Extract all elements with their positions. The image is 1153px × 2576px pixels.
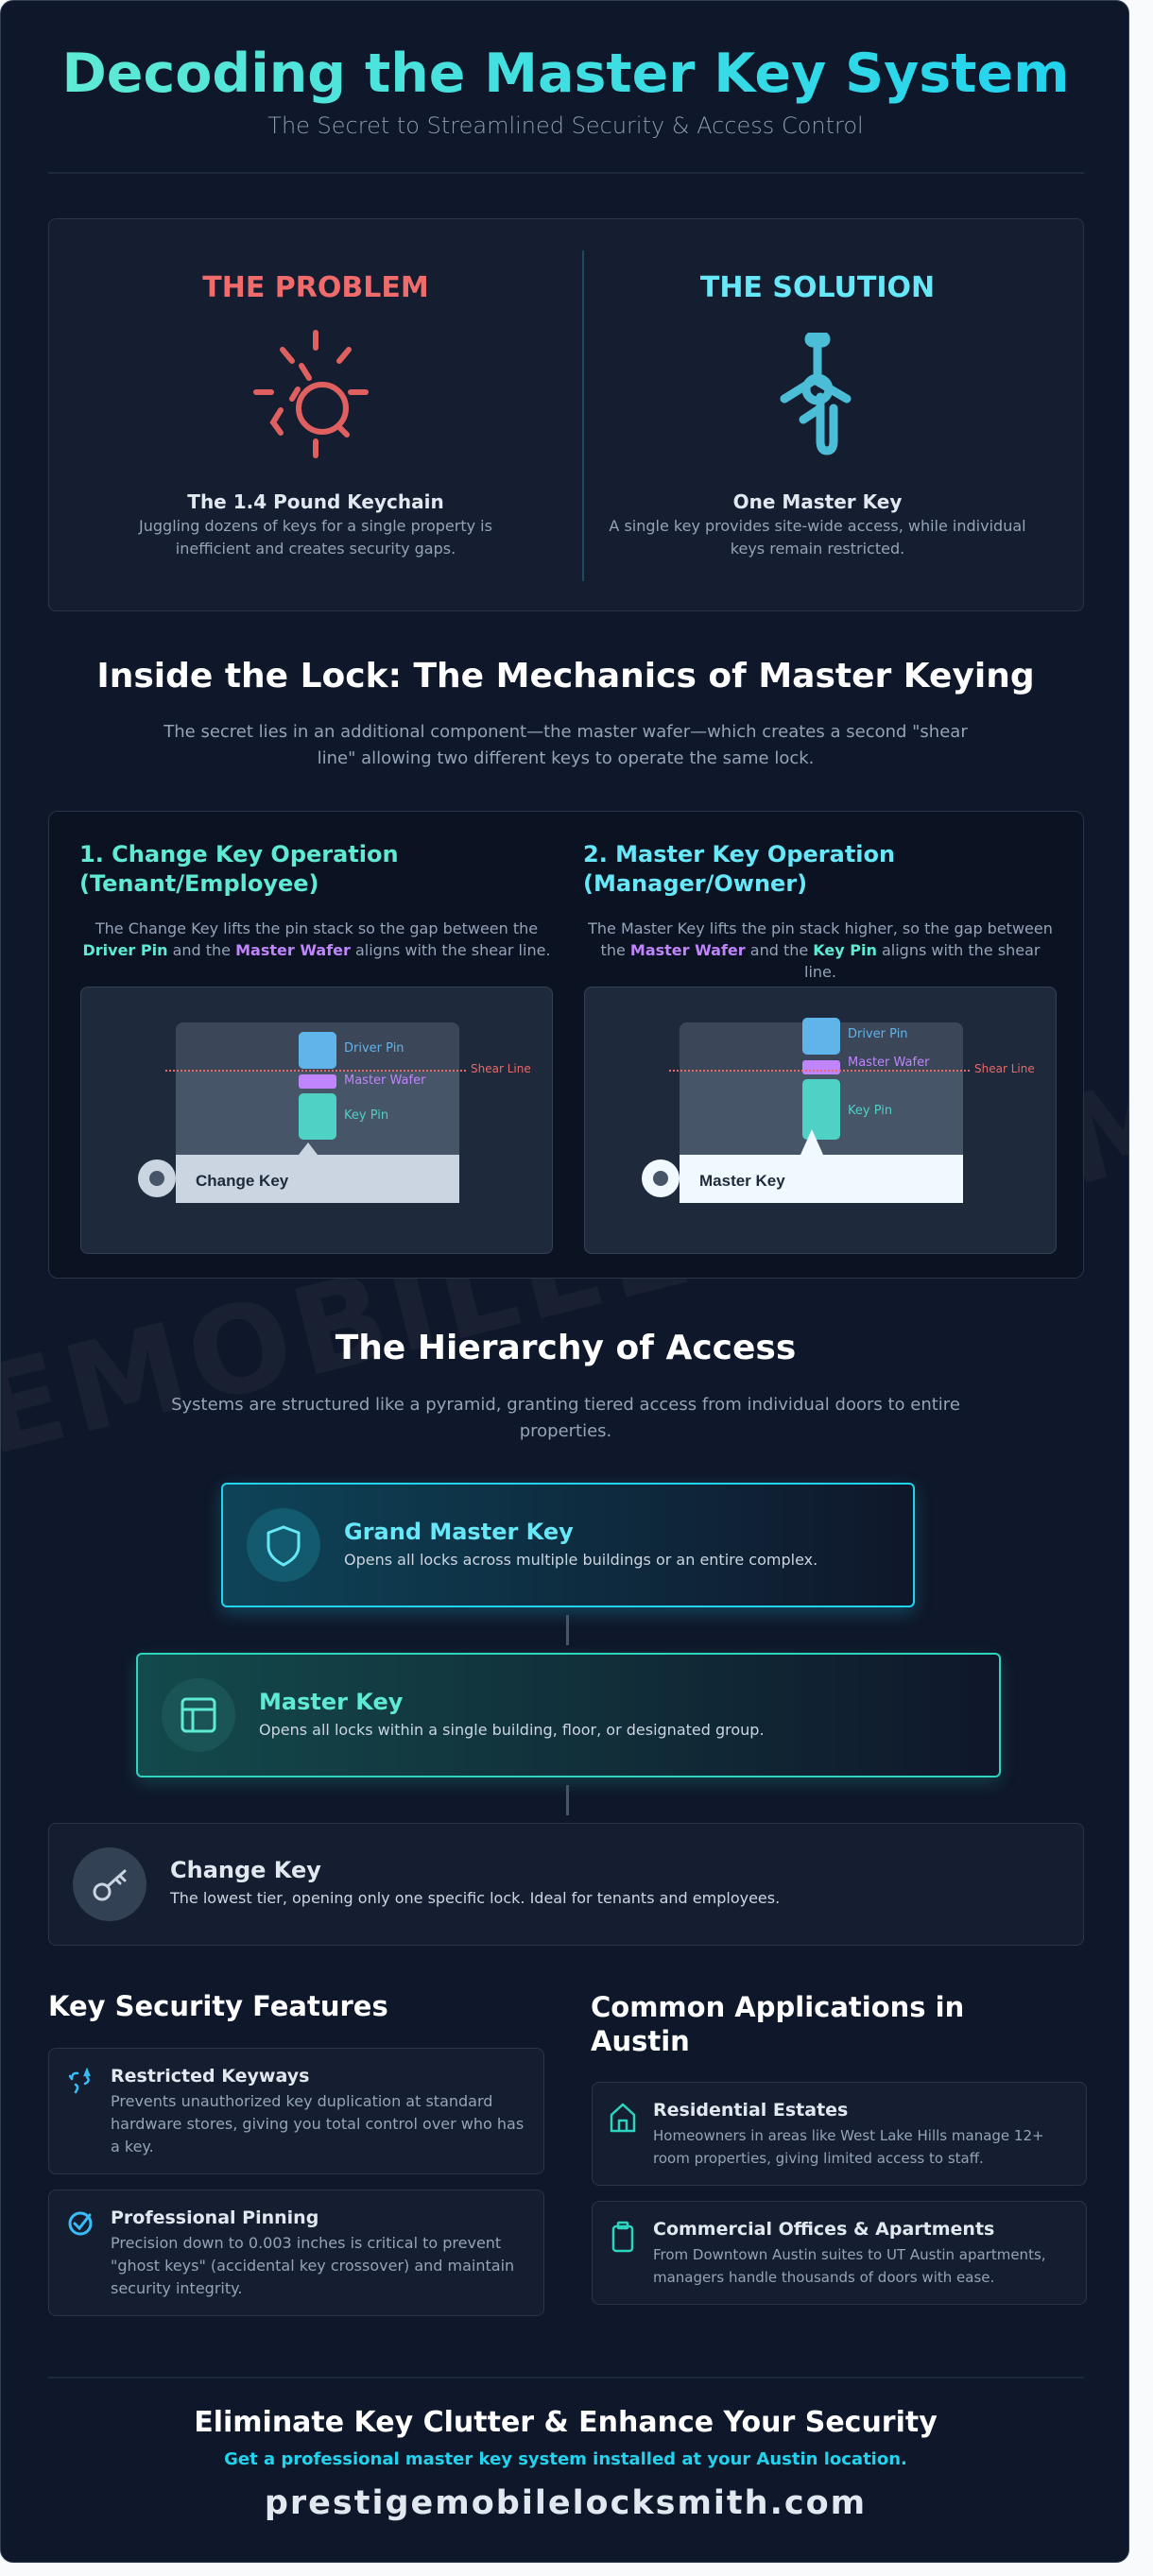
card: residential estates: Residential Estates (653, 2100, 848, 2121)
diagram: change key (80, 987, 553, 1254)
card: commercial offices (592, 2201, 1087, 2305)
column: master key operation (583, 841, 1053, 981)
panel: mechanics (48, 811, 1084, 1279)
heading (79, 841, 399, 897)
icon: check badge (68, 2211, 93, 2236)
heading: 1. Change Key Operation (79, 841, 399, 867)
footer: call to action: Get a professional master key system installed at your Austin location. (224, 2449, 907, 2469)
card: professional pinning (48, 2190, 544, 2316)
card: professional pinning: Professional Pinning (111, 2207, 318, 2228)
heading: the solution: THE SOLUTION (700, 271, 935, 304)
text: one master key: One Master Key (733, 490, 902, 513)
key: master key: Master Key (699, 1172, 785, 1190)
heading: inside the lock: Inside the Lock: The Mechanics of Master Keying (96, 657, 1035, 696)
key: master key (642, 1129, 963, 1203)
heading: (Manager/Owner) (583, 870, 807, 897)
tier: grand master key: Opens all locks across multiple buildings or an entire complex. (344, 1551, 817, 1569)
description: Driver Pin and the Master Wafer aligns with the shear line. (82, 941, 551, 959)
pin: wafer (299, 1074, 336, 1089)
tier: grand master key: Grand Master Key (344, 1519, 574, 1545)
key: change key (138, 1142, 459, 1203)
text: hierarchy intro: Systems are structured like a pyramid, granting tiered access from individual doors to entire properties. (171, 1395, 960, 1441)
diagram: master key (584, 987, 1057, 1254)
diagram: change key: Key Pin (344, 1108, 388, 1123)
tier: change key: Change Key (170, 1857, 321, 1883)
pin: key (299, 1093, 336, 1140)
description: The Master Key lifts the pin stack higher, so the gap between the Master Wafer and the Key Pin aligns with the shear line. (588, 919, 1053, 981)
tier: master key: Master Key (259, 1689, 403, 1715)
icon: house (611, 2104, 635, 2132)
icon: key (73, 1847, 146, 1921)
text: keychain: Juggling dozens of keys for a single property is (139, 517, 492, 535)
solution column (609, 271, 1026, 558)
heading: (Tenant/Employee) (79, 870, 319, 897)
icon: arrows (68, 2068, 91, 2094)
footer: call to action: Eliminate Key Clutter & Enhance Your Security (194, 2406, 938, 2439)
text: one master key: A single key provides site-wide access, while individual (609, 517, 1026, 535)
diagram: master key: Key Pin (848, 1104, 892, 1118)
description (82, 919, 551, 959)
tier: master key: Opens all locks within a single building, floor, or designated group. (259, 1721, 765, 1739)
subtitle: The Secret to Streamlined Security & Access Control (267, 112, 864, 139)
text: one master key (609, 490, 1026, 558)
heading: hierarchy: The Hierarchy of Access (336, 1329, 796, 1367)
diagram: change key: Master Wafer (344, 1073, 425, 1088)
heading: common applications: Common Applications in Austin (591, 1991, 964, 2057)
icon: layout (162, 1678, 235, 1752)
card: commercial offices: Commercial Offices & Apartments (653, 2219, 994, 2240)
card: commercial offices: From Downtown Austin suites to UT Austin apartments, managers handle thousands of doors with ease. (653, 2246, 1046, 2286)
panel: problem vs solution (48, 218, 1084, 611)
key: change key: Change Key (196, 1172, 289, 1190)
description: The Change Key lifts the pin stack so the gap between the (95, 919, 538, 937)
text: one master key: keys remain restricted. (731, 540, 904, 558)
card: residential estates (592, 2082, 1087, 2186)
diagram: change key: Shear Line (471, 1062, 531, 1075)
heading: the problem: THE PROBLEM (202, 271, 429, 304)
icon: broken keychain burst (253, 330, 369, 458)
tier: master key (136, 1653, 1001, 1777)
footer: call to action (194, 2406, 938, 2522)
text: keychain (138, 490, 492, 558)
text: keychain: The 1.4 Pound Keychain (187, 490, 444, 513)
card: restricted keyways: Restricted Keyways (111, 2066, 309, 2087)
title: Decoding the Master Key System (61, 43, 1070, 105)
card: residential estates: Homeowners in areas like West Lake Hills manage 12+ room properties, giving limited access to staff. (653, 2127, 1044, 2167)
diagram: master key: Shear Line (974, 1062, 1035, 1075)
shear line (165, 1070, 466, 1072)
tier: grand master key (221, 1483, 915, 1607)
diagram: master key: Driver Pin (848, 1027, 908, 1041)
icon: clipboard (612, 2221, 633, 2253)
heading (583, 841, 895, 897)
problem column (138, 271, 492, 558)
card: professional pinning: Precision down to 0.003 inches is critical to prevent "ghost keys" (accidental key crossover) and maintain security integrity. (111, 2234, 514, 2297)
heading: 2. Master Key Operation (583, 841, 895, 867)
text: mechanics intro: The secret lies in an additional component—the master wafer—which creates a second "shear line" allowing two different keys to operate the same lock. (163, 722, 968, 768)
diagram: master key: Master Wafer (848, 1056, 929, 1070)
icon: master key (781, 333, 851, 455)
card: restricted keyways (48, 2048, 544, 2174)
pin: driver (299, 1032, 336, 1069)
tier: change key: The lowest tier, opening only one specific lock. Ideal for tenants and employees. (170, 1889, 780, 1907)
icon: shield (247, 1508, 320, 1582)
footer: call to action: prestigemobilelocksmith.com (265, 2484, 867, 2522)
diagram: change key: Driver Pin (344, 1041, 404, 1056)
text: keychain: inefficient and creates security gaps. (176, 540, 456, 558)
card: restricted keyways: Prevents unauthorized key duplication at standard hardware stores, giving you total control over who has a key. (111, 2092, 524, 2155)
column: change key operation (79, 841, 551, 959)
tier: change key (48, 1823, 1084, 1946)
heading: key security features: Key Security Features (48, 1990, 388, 2022)
